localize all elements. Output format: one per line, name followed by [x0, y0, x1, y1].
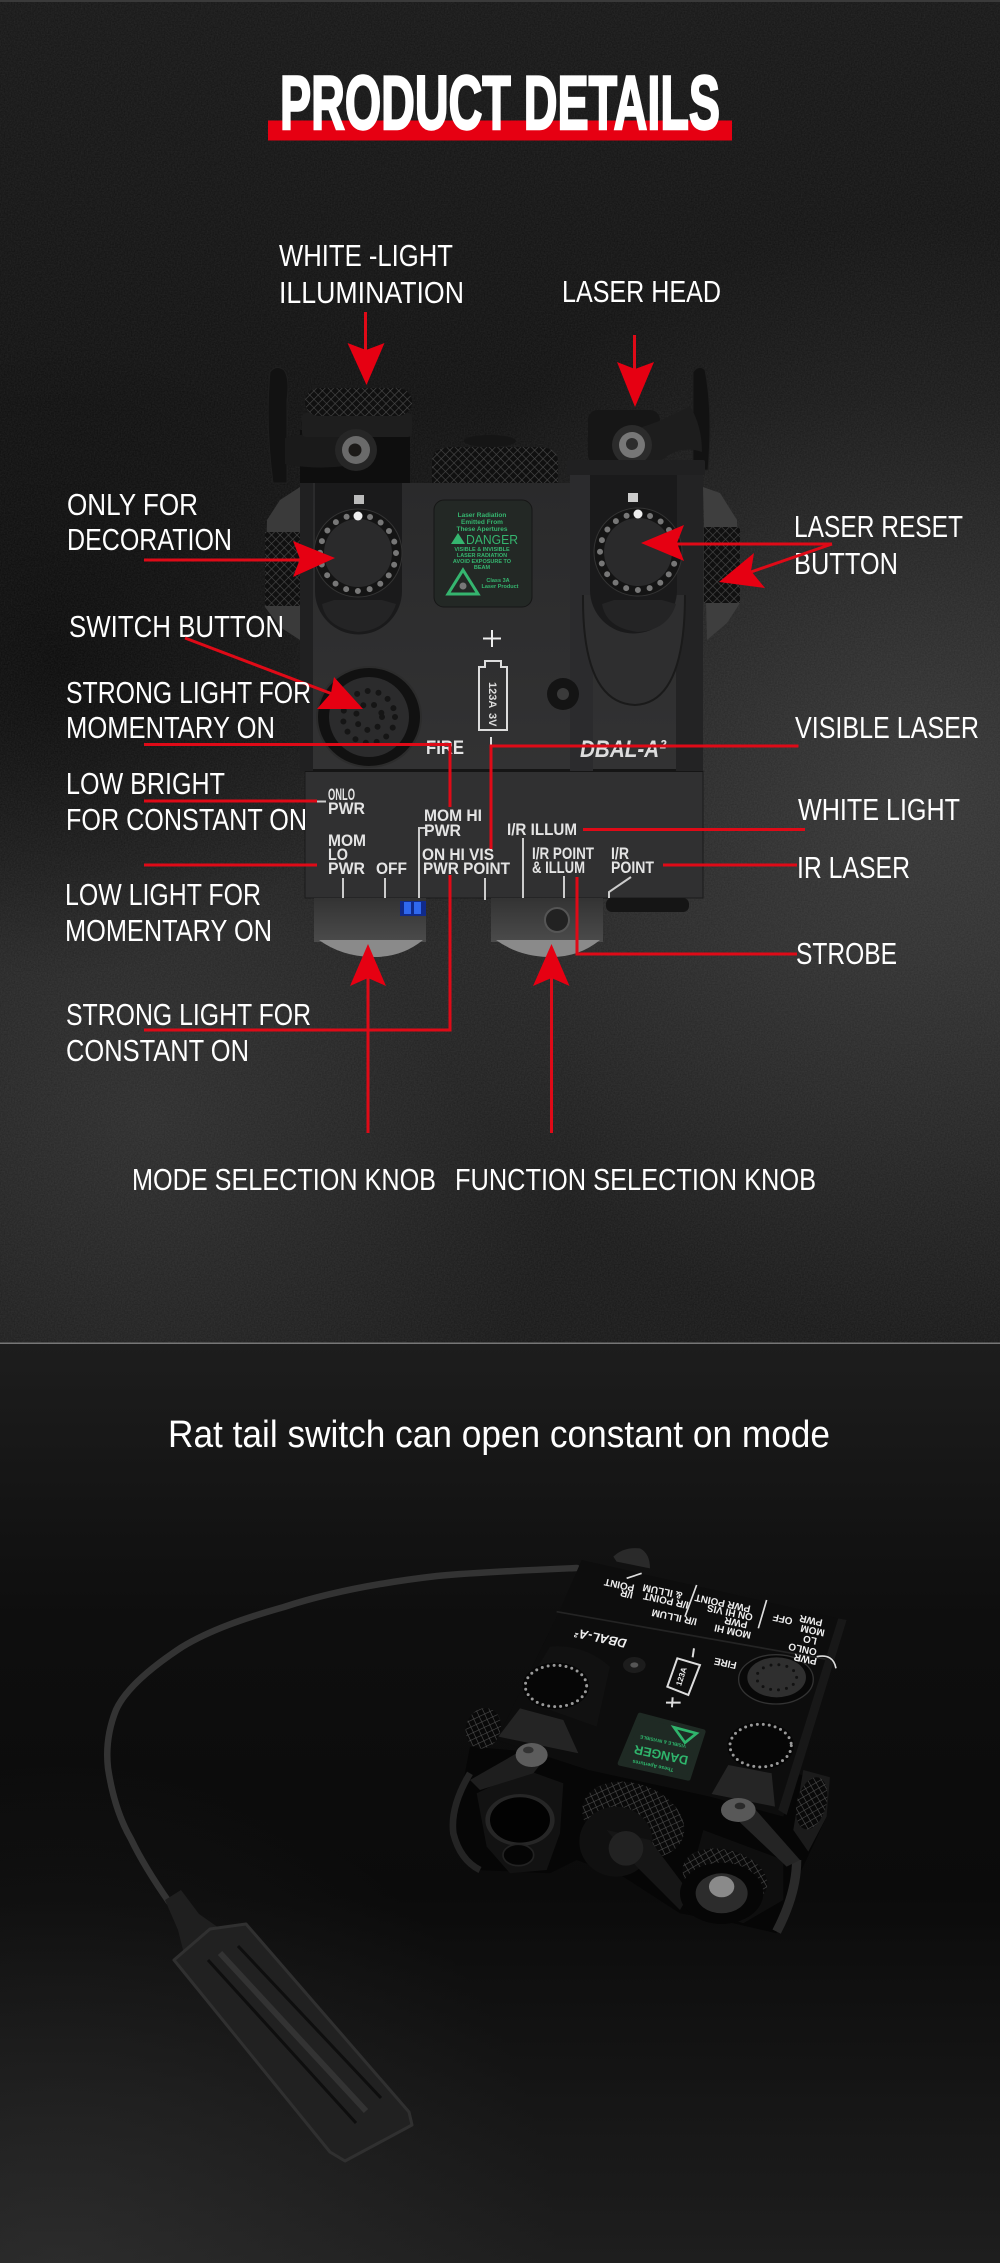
switch button: [739, 1655, 813, 1704]
arrow: white-light illumination: [348, 312, 384, 385]
mode and function switch legends: MOM HI: [424, 806, 482, 825]
mode and function switch legends: OFF: [376, 859, 407, 878]
upside-down legends: & ILLUM: [642, 1581, 684, 1600]
device: angled view of the laser unit: [453, 1548, 847, 1933]
label: white light: WHITE LIGHT: [798, 792, 960, 827]
green danger label: DANGER: [633, 1742, 689, 1767]
function selection knob: [491, 898, 603, 957]
left rail: [300, 483, 313, 771]
green danger label: [434, 500, 532, 607]
strain relief: [165, 1890, 219, 1954]
left hinge plate: [268, 367, 288, 483]
label: mode selection knob: MODE SELECTION KNOB: [132, 1162, 436, 1197]
left knurled wheel: [460, 1703, 507, 1754]
mode and function switch legends: PWR: [328, 799, 365, 818]
fire label: FIRE: [426, 738, 464, 759]
upside-down legends: FIRE: [713, 1655, 738, 1670]
leader: ir laser: [663, 864, 797, 866]
mode and function switch legends: PWR: [424, 821, 461, 840]
green danger label: These Apertures: [456, 526, 508, 533]
label: only for decoration: [67, 487, 232, 557]
leader: strong light for constant on: [144, 875, 450, 1030]
arrow: switch button: [185, 638, 363, 709]
green danger label: VISIBLE & INVISIBLE: [640, 1734, 686, 1749]
mode and function switch legends: I/R ILLUM: [507, 820, 577, 839]
left hinge arm and screw: [470, 1743, 548, 1790]
right turret: laser head: [588, 406, 702, 474]
upside-down legends: PWR POINT: [694, 1591, 752, 1614]
right side wing with knurled wheel: [703, 487, 740, 640]
green danger label: Laser Radiation: [458, 512, 506, 519]
middle knurled cap: [432, 435, 558, 484]
mode and function switch legends: POINT: [611, 858, 655, 877]
rear connector: [613, 1548, 650, 1568]
middle knurled cap and dust cover: [572, 1768, 695, 1910]
mode and function switch legends: MOM: [328, 831, 366, 850]
label: low light for momentary on: LOW LIGHT FOR: [65, 877, 261, 912]
mode and function switch legends: PWR: [328, 859, 365, 878]
label: ir laser: IR LASER: [797, 850, 910, 885]
lower control panel: [305, 771, 703, 898]
label: laser reset button: [794, 509, 963, 581]
body seam: [557, 1612, 830, 1660]
mode and function switch legends: LO: [328, 845, 348, 864]
arrow: laser reset to side wheel: [719, 544, 832, 588]
body: [497, 1560, 847, 1817]
green danger label: Laser Product: [482, 584, 519, 590]
right hinge plate: [693, 367, 710, 470]
screw: [623, 1657, 646, 1673]
green danger label: Emitted From: [461, 519, 503, 526]
right dial: [594, 493, 682, 632]
arrow: laser head: [617, 335, 654, 407]
upside-down legends: MOM HI: [713, 1621, 752, 1640]
label: white-light illumination: ILLUMINATION: [279, 275, 464, 310]
label: low light for momentary on: [65, 877, 272, 948]
label: low bright for constant on: LOW BRIGHT: [66, 766, 225, 801]
label: only for decoration: DECORATION: [67, 522, 232, 557]
left dial: [523, 1663, 589, 1709]
upside-down legends: POINT: [603, 1576, 636, 1593]
left dial recess: [530, 1646, 610, 1727]
heading: rat tail switch: Rat tail switch can open constant on mode: [168, 1414, 830, 1456]
arrow: mode selection knob: [350, 944, 386, 1133]
mode and function switch legends: [300, 785, 655, 900]
arrow: laser reset to dial: [641, 525, 832, 561]
left hinge: [453, 1773, 480, 1870]
green danger label: Class 3A: [486, 578, 510, 584]
rear cap: [606, 898, 689, 912]
upside-down legends: OFF: [772, 1611, 794, 1626]
green danger label: VISIBLE & INVISIBLE: [454, 547, 510, 553]
upside-down legends: MOM: [800, 1622, 826, 1638]
mode and function switch legends: I/R: [611, 844, 629, 863]
device: front view of the laser unit: [265, 367, 740, 957]
battery icon: 123A: [674, 1666, 689, 1687]
upside-down legends: ONLO: [787, 1640, 818, 1657]
right dial: [727, 1722, 794, 1770]
right hinge arm and screw: [721, 1798, 800, 1867]
label: switch button: SWITCH BUTTON: [69, 609, 284, 644]
main housing: [305, 483, 703, 771]
laser barrel: [477, 1770, 563, 1873]
upside-down legends: I/R ILLUM: [651, 1606, 698, 1627]
side rail: [778, 1618, 847, 1815]
upside-down legends: LO: [802, 1632, 818, 1646]
leader: low bright for constant on: [144, 800, 317, 802]
minus sign: [490, 737, 492, 757]
rat tail pressure pad: [165, 1890, 412, 2161]
label: function selection knob: FUNCTION SELECTION KNOB: [455, 1162, 816, 1197]
label: white-light illumination: WHITE -LIGHT: [279, 238, 453, 273]
battery icon: 3V: [486, 713, 498, 727]
label: low light for momentary on: MOMENTARY ON: [65, 913, 272, 948]
green danger label: These Apertures: [632, 1758, 674, 1772]
battery icon: [479, 661, 507, 730]
pad ridges: [208, 1946, 381, 2123]
switch button: [317, 667, 421, 767]
label: low bright for constant on: [66, 766, 307, 837]
green danger label: AVOID EXPOSURE TO: [453, 559, 512, 565]
right tab: [712, 1765, 775, 1807]
hex screw: [547, 678, 579, 710]
right rail with slider guard: [567, 460, 705, 771]
right hinge: [777, 1860, 797, 1932]
upside-down legends: PWR: [793, 1651, 818, 1666]
leader: low light for momentary on: [144, 864, 317, 866]
panel: rat tail background: [0, 1344, 1000, 2263]
left dial pocket: [315, 483, 402, 634]
upside-down legends: I/R POINT: [642, 1590, 690, 1610]
title: product details: [268, 61, 732, 146]
blue indicator: [400, 901, 426, 916]
plus sign: [483, 630, 501, 647]
leader: strong light for momentary on: [144, 744, 450, 807]
leader: visible laser: [491, 746, 798, 849]
leader: white light: [583, 828, 805, 831]
upside-down legends: PWR: [799, 1612, 824, 1628]
panel: product details background: [0, 0, 1000, 1344]
left turret: knurled white-light head: [285, 388, 412, 485]
green danger label: DANGER: [466, 532, 518, 547]
mode and function switch legends: ONLO: [328, 785, 355, 804]
label: strong light for momentary on: MOMENTARY ON: [66, 710, 275, 745]
cable: rat tail lead: [107, 1568, 577, 1902]
label: strong light for momentary on: [66, 675, 311, 745]
green danger label: [620, 1715, 703, 1778]
arrow: only for decoration: [144, 541, 335, 577]
mode and function switch legends: ON HI VIS: [422, 845, 494, 864]
left side wing with knurled wheel: [265, 487, 300, 640]
lower silhouette: [453, 1747, 830, 1933]
brand label: DBAL-A²: [580, 736, 667, 763]
right dial pocket: [590, 475, 677, 634]
green danger label: LASER RADIATION: [457, 553, 507, 559]
upside-down legends: I/R: [619, 1586, 634, 1600]
battery icon: 123A: [486, 682, 498, 708]
left tab: [498, 1708, 578, 1753]
upside-down legends: DBAL-A²: [573, 1625, 628, 1650]
mode selection knob: [314, 898, 426, 957]
label: strong light for constant on: STRONG LIGHT FOR: [66, 997, 311, 1032]
label: strobe: STROBE: [796, 936, 897, 971]
label: laser head: LASER HEAD: [562, 274, 721, 309]
label: strong light for momentary on: STRONG LIGHT FOR: [66, 675, 311, 710]
leader: strobe: [577, 877, 797, 954]
right wing and knurled wheel: [791, 1770, 833, 1852]
upside-down legends: [573, 1573, 836, 1670]
title: product details: PRODUCT DETAILS: [280, 61, 720, 146]
panel seam: [305, 769, 703, 772]
label: low bright for constant on: FOR CONSTANT ON: [66, 802, 307, 837]
upside-down legends: PWR: [724, 1614, 749, 1630]
label: strong light for constant on: CONSTANT ON: [66, 1033, 249, 1068]
pad body: [174, 1924, 412, 2161]
left dial: [314, 495, 402, 632]
green danger label: BEAM: [474, 565, 491, 571]
label: strong light for constant on: [66, 997, 311, 1068]
mode and function switch legends: & ILLUM: [532, 858, 585, 877]
label: only for decoration: ONLY FOR: [67, 487, 198, 522]
mode and function switch legends: I/R POINT: [532, 844, 594, 863]
label: white-light illumination: [279, 238, 464, 310]
mode and function switch legends: PWR POINT: [423, 859, 511, 878]
white-light head: [676, 1830, 783, 1924]
battery icon: [666, 1648, 700, 1707]
upside-down legends: ON HI VIS: [706, 1601, 754, 1622]
label: laser reset button: BUTTON: [794, 546, 898, 581]
arrow: function selection knob: [533, 944, 570, 1133]
